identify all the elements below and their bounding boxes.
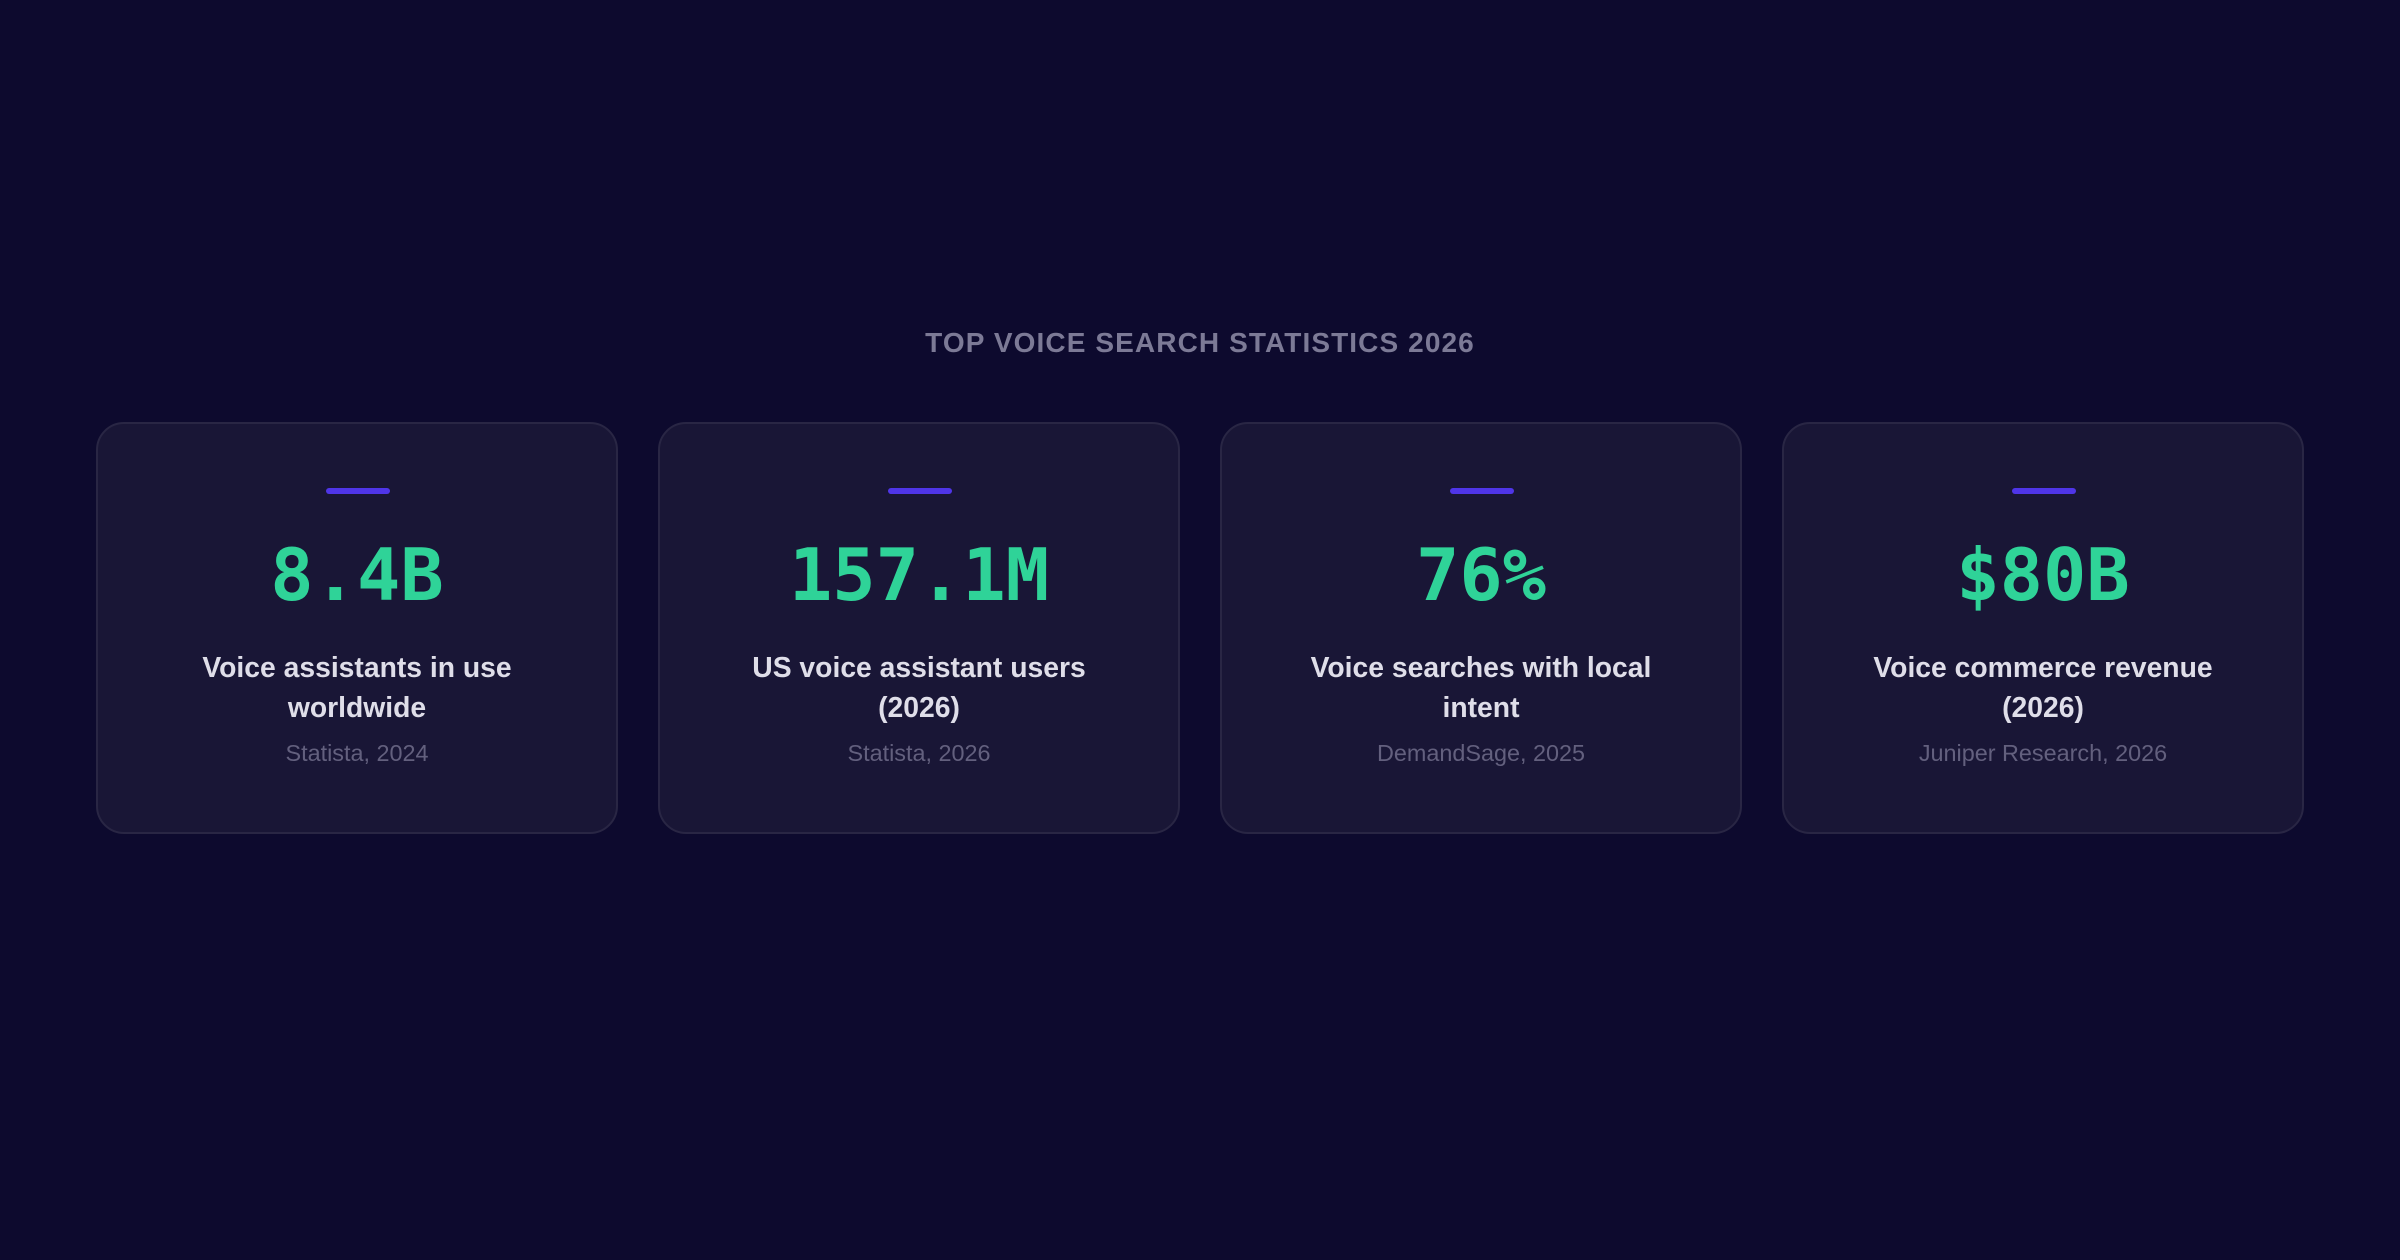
panel: US voice assistant users xyxy=(658,422,1180,834)
stat label xyxy=(1310,651,1651,723)
accent bar xyxy=(1450,488,1514,494)
panel: voice assistants worldwide xyxy=(96,422,618,834)
stat label: (2026) xyxy=(2002,691,2084,723)
stat label: Voice assistants in use xyxy=(202,651,512,683)
stat label: worldwide xyxy=(288,691,426,723)
stat label: Voice searches with local xyxy=(1311,651,1651,683)
stat label: Voice commerce revenue xyxy=(1873,651,2213,683)
accent bar xyxy=(326,488,390,494)
stat number: 76% xyxy=(1416,533,1546,617)
stat number: 157.1M xyxy=(789,533,1049,617)
stat label: (2026) xyxy=(878,691,960,723)
source: Statista, 2026 xyxy=(847,740,991,766)
stat number: $80B xyxy=(1956,533,2130,617)
stat label xyxy=(202,651,512,723)
accent bar xyxy=(888,488,952,494)
stat label xyxy=(1873,651,2213,723)
source: Juniper Research, 2026 xyxy=(1919,740,2167,766)
stat label: US voice assistant users xyxy=(752,651,1086,683)
stat label xyxy=(752,651,1086,723)
source: Statista, 2024 xyxy=(285,740,429,766)
source: DemandSage, 2025 xyxy=(1377,740,1585,766)
stat label: intent xyxy=(1442,691,1520,723)
accent bar xyxy=(2012,488,2076,494)
panel: local intent xyxy=(1220,422,1742,834)
panel: voice commerce revenue xyxy=(1782,422,2304,834)
title: TOP VOICE SEARCH STATISTICS 2026 xyxy=(925,327,1475,358)
stat number: 8.4B xyxy=(270,533,444,617)
